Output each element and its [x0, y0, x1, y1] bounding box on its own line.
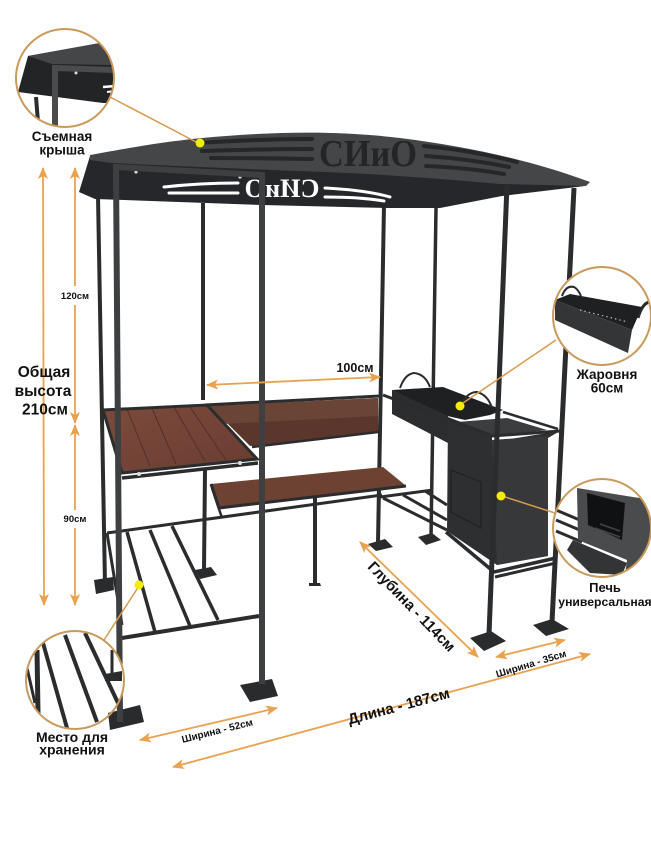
- label: brazier: Жаровня: [577, 367, 637, 382]
- label: depth: Глубина - 114см: [364, 558, 458, 655]
- label: universal stove: универсальная: [558, 595, 651, 609]
- arrow: total height: [43, 168, 44, 605]
- roof logo: СИиО: [319, 133, 417, 175]
- label: storage: хранения: [39, 742, 105, 758]
- inset: stove: [553, 479, 651, 580]
- label: total height: 210см: [22, 402, 68, 418]
- label: length: Длина - 187см: [346, 685, 452, 728]
- storage rack: [107, 490, 447, 638]
- label: 90 cm: 90см: [64, 514, 86, 525]
- label: 100 cm: 100см: [336, 361, 374, 375]
- label: storage: Место для: [36, 729, 108, 745]
- front cut-out logo: СИиО: [244, 174, 320, 203]
- roof: [79, 133, 590, 208]
- stove and brazier: [383, 373, 560, 577]
- label: width 52: Ширина - 52см: [181, 717, 254, 746]
- arrow: 120 cm: [74, 168, 76, 423]
- stove body: [447, 417, 560, 565]
- arrow: 100 cm: [207, 377, 380, 385]
- inset: removable roof: [16, 29, 115, 127]
- label: removable roof: крыша: [39, 142, 85, 158]
- arrow: depth: [360, 542, 478, 657]
- label: total height: высота: [15, 383, 72, 400]
- inset: storage: [26, 631, 135, 730]
- bench seat: [211, 467, 406, 518]
- bench back: [205, 396, 380, 447]
- table: [103, 405, 258, 478]
- label: 120 cm: 120см: [61, 291, 89, 302]
- brazier: [392, 373, 503, 443]
- label: total height: Общая: [18, 364, 70, 381]
- dimension arrows: [43, 168, 590, 767]
- label: brazier: 60см: [591, 380, 623, 396]
- stove top shelf: [457, 418, 547, 437]
- callout leader lines: [104, 97, 558, 640]
- label: universal stove: Печь: [589, 580, 621, 595]
- arrow: length: [173, 654, 590, 767]
- label: removable roof: Съемная: [32, 129, 92, 144]
- label: width 35: Ширина - 35см: [495, 649, 568, 681]
- back posts and feet: [94, 188, 574, 622]
- arrow: width 52: [140, 708, 277, 740]
- arrow: width 35: [496, 640, 565, 657]
- arrow: 90 cm: [74, 425, 76, 605]
- yellow markers: [134, 138, 506, 590]
- inset: brazier: [553, 267, 651, 365]
- front frame and feet: [108, 167, 569, 730]
